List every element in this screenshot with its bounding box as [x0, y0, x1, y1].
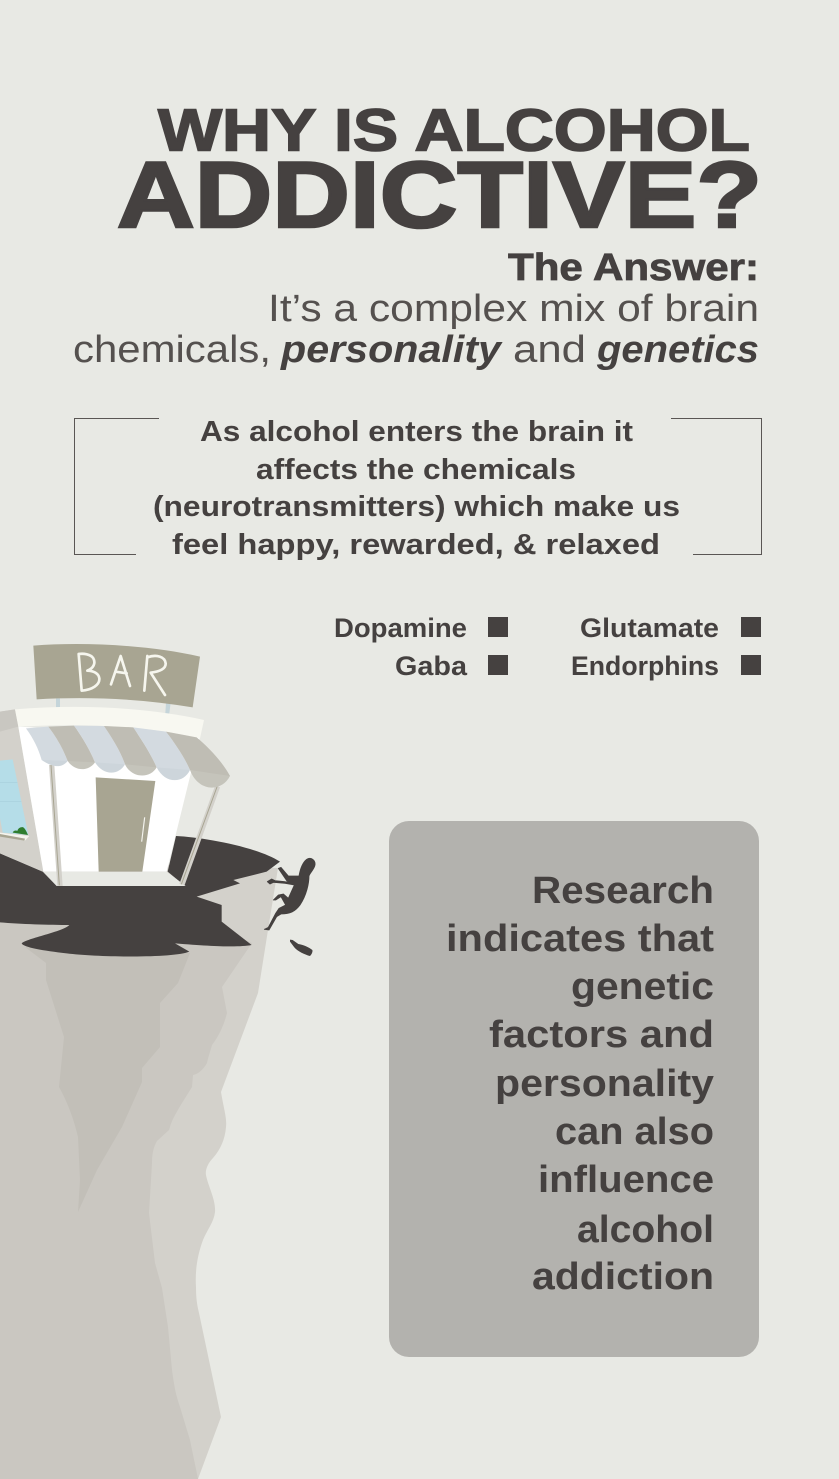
- awning: [26, 726, 230, 788]
- roof band: [15, 707, 204, 738]
- awning pole shading: [51, 765, 217, 885]
- sign: [33, 644, 200, 707]
- title: ADDICTIVE?: [117, 142, 762, 247]
- bracketed explanation: (neurotransmitters) which make us: [153, 491, 680, 523]
- title: [117, 98, 762, 247]
- legend: Dopamine: [334, 613, 467, 643]
- illustration: bar building on dark pool: [0, 644, 280, 957]
- panel: research callout: Research: [532, 870, 714, 912]
- answer text block: It’s a complex mix of brain: [268, 288, 759, 330]
- panel: research callout: influence: [538, 1159, 714, 1201]
- answer text block: and: [513, 329, 586, 371]
- panel: research callout: [389, 821, 759, 1357]
- answer text block: [73, 247, 759, 371]
- panel: research callout: indicates that: [446, 918, 714, 960]
- door: [96, 777, 155, 872]
- storefront: [18, 727, 200, 872]
- illustration: cliff: [0, 860, 278, 1479]
- title: WHY IS ALCOHOL: [158, 98, 750, 164]
- icon: climber silhouette: [264, 858, 315, 930]
- answer text block: The Answer:: [508, 247, 759, 289]
- left wall top shade: [0, 709, 18, 732]
- dark pool: [0, 836, 280, 957]
- panel: research callout: genetic: [571, 966, 714, 1008]
- answer text block: personality: [280, 329, 503, 371]
- legend: Glutamate: [580, 613, 719, 643]
- answer text block: chemicals,: [73, 329, 271, 371]
- bracketed explanation: As alcohol enters the brain it: [200, 416, 633, 448]
- legend: Endorphins: [571, 651, 719, 681]
- bracketed explanation: affects the chemicals: [256, 454, 576, 486]
- step: [43, 872, 186, 886]
- window: [0, 759, 29, 841]
- bracketed explanation: feel happy, rewarded, & relaxed: [172, 529, 660, 561]
- panel: research callout: addiction: [532, 1256, 714, 1298]
- answer text block: genetics: [596, 329, 759, 371]
- bracketed explanation: [74, 416, 762, 561]
- left wall: [0, 709, 43, 872]
- panel: research callout: factors and: [489, 1014, 714, 1056]
- legend: [334, 613, 761, 681]
- awning poles: [49, 765, 220, 886]
- sign posts: [56, 698, 171, 713]
- panel: research callout: personality: [495, 1063, 714, 1105]
- panel: research callout: can also: [555, 1111, 714, 1153]
- icon: falling bottle: [290, 940, 313, 956]
- panel: research callout: alcohol: [577, 1209, 714, 1251]
- legend: Gaba: [395, 651, 468, 681]
